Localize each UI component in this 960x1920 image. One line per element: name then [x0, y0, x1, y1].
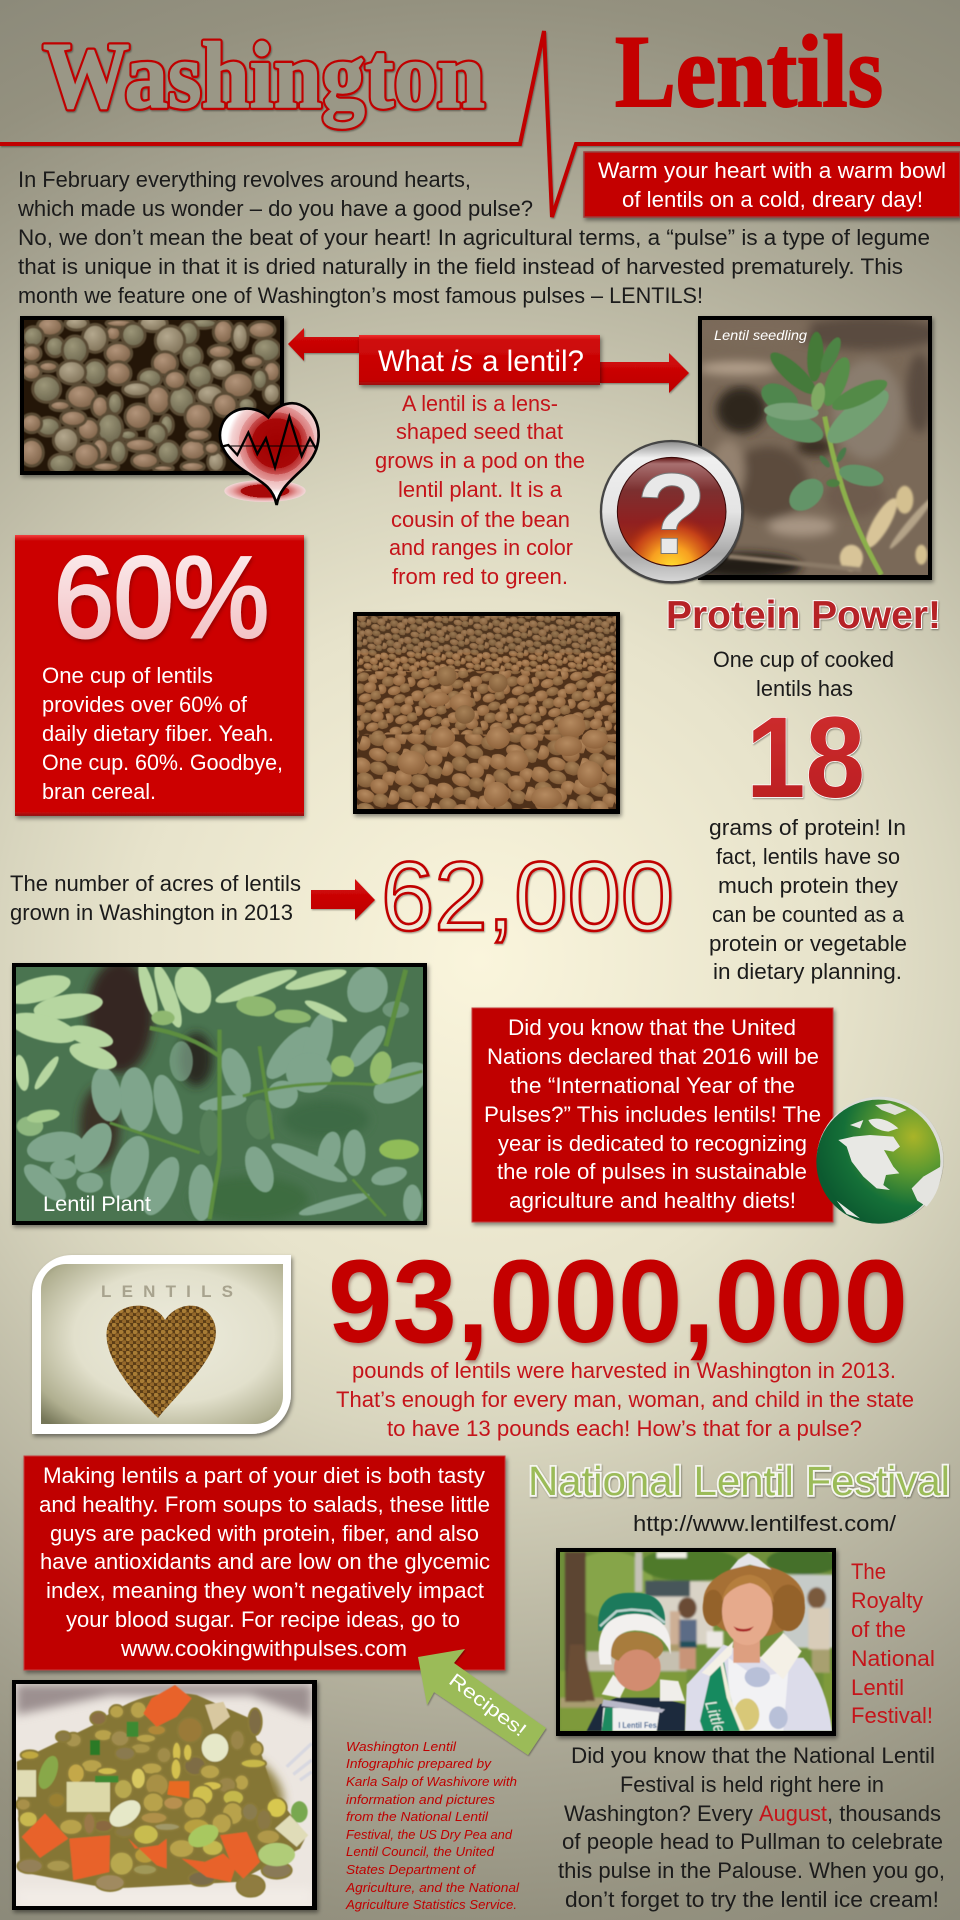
text block: what is a lentil: lentil plant. It is a: [398, 477, 563, 502]
panel: recipes text: index, meaning they won’t negatively impact: [46, 1578, 484, 1603]
panel: international year of pulses: the role of pulses in sustainable: [497, 1159, 807, 1184]
credits: from the National Lentil: [346, 1809, 489, 1824]
panel: recipes text: [24, 1456, 505, 1670]
credits: Festival, the US Dry Pea and: [346, 1827, 513, 1842]
heading button: what is a lentil: [359, 335, 600, 385]
text block: what is a lentil: [375, 391, 585, 589]
credits: Agriculture Statistics Service.: [345, 1897, 517, 1912]
callout: warm your heart: [584, 152, 960, 217]
arrow: left: [288, 328, 359, 361]
text: festival paragraph: , thousands: [827, 1801, 941, 1826]
heading: Protein Power: Protein Power!: [666, 594, 941, 637]
icon: heart with pulse: [220, 403, 319, 505]
credits: Washington Lentil: [346, 1739, 457, 1754]
arrow: to 62,000: [311, 879, 375, 920]
label: Recipes!: Recipes!: [445, 1670, 530, 1741]
arrow: recipes: [418, 1649, 546, 1755]
text: grams of protein: much protein they: [718, 873, 898, 898]
text: fiber: bran cereal.: [42, 779, 156, 804]
panel: international year of pulses: Did you know that the United: [508, 1015, 796, 1040]
photo: lentil seedling: Lentil seedling: [714, 327, 807, 343]
title: Lentils: Lentils: [615, 15, 883, 129]
text: grams of protein: can be counted as a: [712, 902, 905, 927]
panel: recipes text: and healthy. From soups to salads, these little: [39, 1492, 490, 1517]
text: the royalty: The: [851, 1559, 886, 1584]
heading button: what is a lentil: is: [451, 345, 473, 378]
intro text: No, we don’t mean the beat of your heart! In agricultural terms, a “pulse” is a type of legume: [18, 225, 930, 250]
panel: recipes text: your blood sugar. For recipe ideas, go to: [66, 1607, 460, 1632]
photo: lentil salad: [12, 1680, 317, 1910]
intro text: month we feature one of Washington’s most famous pulses – LENTILS!: [18, 283, 703, 308]
stat: 18: 18: [746, 694, 865, 822]
lentil heart shape: [106, 1306, 216, 1418]
text: pounds harvested: to have 13 pounds each! How’s that for a pulse?: [387, 1416, 862, 1441]
text: festival paragraph: of people head to Pullman to celebrate: [562, 1829, 943, 1854]
text: one cup cooked: [713, 647, 894, 701]
panel: international year of pulses: [472, 1008, 833, 1222]
photo: festival royalty: l Lentil Fes: [618, 1721, 657, 1730]
panel: recipes text: guys are packed with protein, fiber, and also: [50, 1521, 479, 1546]
credits: Karla Salp of Washivore with: [346, 1774, 517, 1789]
stat: 93,000,000: 93,000,000: [328, 1236, 908, 1368]
text: number of acres: [10, 871, 301, 925]
text: festival paragraph: [558, 1743, 945, 1912]
text: the royalty: of the: [851, 1617, 906, 1642]
photo: lentil heart: [32, 1255, 291, 1434]
panel: recipes text: www.cookingwithpulses.com: [120, 1636, 407, 1661]
pulse line: [0, 31, 960, 217]
photo: festival royalty: [556, 1548, 840, 1736]
text block: what is a lentil: from red to green.: [392, 564, 568, 589]
credits: [345, 1739, 520, 1912]
icon: question mark badge: [601, 441, 742, 582]
text: the royalty: [851, 1559, 935, 1728]
text: fiber: [42, 663, 283, 804]
panel: international year of pulses: the “International Year of the: [510, 1073, 795, 1098]
text block: what is a lentil: shaped seed that: [396, 419, 563, 444]
text: one cup cooked: One cup of cooked: [713, 647, 894, 672]
text: the royalty: Royalty: [851, 1588, 923, 1613]
panel: recipes text: Making lentils a part of your diet is both tasty: [43, 1463, 485, 1488]
icon: question mark badge: ?: [637, 450, 707, 578]
heading: National Lentil Festival: National Lentil Festival: [528, 1458, 950, 1504]
callout: warm your heart: Warm your heart with a warm bowl: [598, 158, 946, 183]
panel: international year of pulses: agriculture and healthy diets!: [509, 1188, 796, 1213]
intro text: In February everything revolves around hearts,: [18, 167, 471, 192]
text: number of acres: The number of acres of lentils: [10, 871, 301, 896]
heading button: what is a lentil: What: [378, 345, 445, 378]
text: pounds harvested: That’s enough for every man, woman, and child in the state: [336, 1387, 914, 1412]
text: grams of protein: grams of protein! In: [709, 815, 906, 840]
credits: Agriculture, and the National: [345, 1880, 520, 1895]
text: festival paragraph: Festival is held right here in: [620, 1772, 884, 1797]
intro text: which made us wonder – do you have a good pulse?: [17, 196, 533, 221]
text: festival paragraph: Did you know that the National Lentil: [571, 1743, 935, 1768]
text: the royalty: Festival!: [851, 1703, 933, 1728]
text: grams of protein: fact, lentils have so: [716, 844, 900, 869]
text: the royalty: Lentil: [851, 1675, 904, 1700]
text block: what is a lentil: A lentil is a lens-: [402, 391, 558, 416]
intro text: [17, 167, 930, 308]
panel: international year of pulses: year is dedicated to recognizing: [498, 1131, 807, 1156]
stat: 62,000: 62,000: [381, 841, 674, 951]
text block: what is a lentil: grows in a pod on the: [375, 448, 585, 473]
icon: globe: [816, 1097, 943, 1224]
panel: international year of pulses: Pulses?” This includes lentils! The: [484, 1102, 821, 1127]
title: Washington: Washington: [43, 24, 485, 128]
credits: information and pictures: [346, 1792, 496, 1807]
arrow: right: [600, 353, 689, 393]
photo: lentils close-up: [20, 315, 284, 475]
credits: Lentil Council, the United: [346, 1844, 495, 1859]
text: festival paragraph: Washington? Every: [564, 1801, 753, 1826]
photo: brown lentils: [353, 612, 620, 814]
text: grams of protein: [709, 815, 907, 984]
photo: lentil plant: Lentil Plant: [43, 1193, 151, 1216]
text: fiber: One cup. 60%. Goodbye,: [42, 750, 283, 775]
callout: warm your heart: of lentils on a cold, dreary day!: [622, 187, 923, 212]
panel: 60 percent fiber: [15, 534, 304, 816]
text block: what is a lentil: cousin of the bean: [391, 507, 570, 532]
text: festival paragraph: don’t forget to try the lentil ice cream!: [565, 1887, 939, 1912]
stat: 60%: 60%: [54, 534, 269, 662]
credits: Infographic prepared by: [346, 1756, 493, 1771]
text: festival paragraph: this pulse in the Palouse. When you go,: [558, 1858, 945, 1883]
photo: lentil seedling: [688, 316, 941, 580]
photo: lentil plant: [3, 960, 435, 1225]
label: LENTILS: LENTILS: [101, 1282, 233, 1301]
text: grams of protein: protein or vegetable: [709, 931, 907, 956]
text: grams of protein: in dietary planning.: [713, 959, 902, 984]
text block: what is a lentil: and ranges in color: [389, 535, 573, 560]
text: fiber: One cup of lentils: [42, 663, 213, 688]
text: fiber: provides over 60% of: [42, 692, 248, 717]
panel: international year of pulses: Nations declared that 2016 will be: [487, 1044, 819, 1069]
credits: States Department of: [346, 1862, 476, 1877]
heading button: what is a lentil: a lentil?: [482, 345, 584, 378]
text: the royalty: National: [851, 1646, 935, 1671]
text: pounds harvested: pounds of lentils were harvested in Washington in 2013.: [352, 1358, 896, 1383]
text: number of acres: grown in Washington in 2013: [10, 900, 293, 925]
text: one cup cooked: lentils has: [756, 676, 853, 701]
title: Washington: Washington: [43, 24, 485, 128]
text: fiber: daily dietary fiber. Yeah.: [42, 721, 274, 746]
text: festival url: http://www.lentilfest.com/: [633, 1511, 897, 1536]
intro text: that is unique in that it is dried naturally in the field instead of harvested prematurely. This: [18, 254, 903, 279]
panel: recipes text: have antioxidants and are low on the glycemic: [40, 1549, 490, 1574]
text: festival paragraph: August: [759, 1801, 827, 1826]
text: pounds harvested: [336, 1358, 914, 1441]
